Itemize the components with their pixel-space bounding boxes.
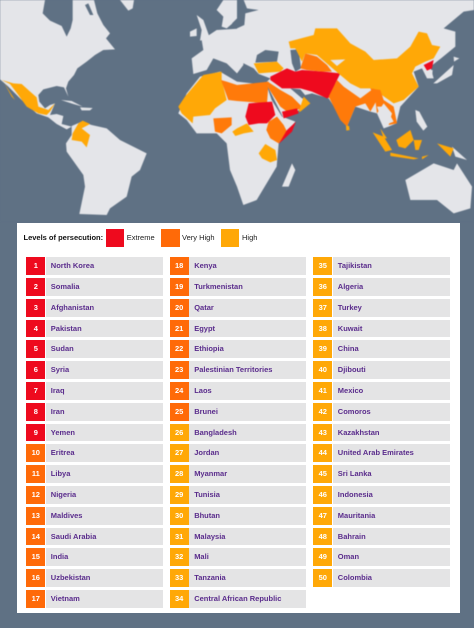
row 43: Kazakhstan xyxy=(338,428,379,437)
country: Central African Republic xyxy=(232,123,254,136)
row 1: 1 xyxy=(34,261,38,270)
row 18: 18 xyxy=(175,261,183,270)
row 13: 13 xyxy=(32,511,40,520)
row 21: Egypt xyxy=(194,324,215,333)
row 8: Iran xyxy=(51,407,65,416)
row 36: Algeria xyxy=(338,282,363,291)
row 42: 42 xyxy=(319,407,327,416)
row 6: Syria xyxy=(51,365,69,374)
row 18: Kenya xyxy=(194,261,217,270)
row 15 xyxy=(26,548,163,566)
country: Yemen xyxy=(282,108,299,118)
water: Black Sea xyxy=(255,50,279,63)
row 41: Mexico xyxy=(338,386,363,395)
row 48 xyxy=(313,528,450,545)
row 16 xyxy=(26,569,163,587)
row 45: Sri Lanka xyxy=(338,469,372,478)
row 29 xyxy=(170,486,306,504)
row 40: Djibouti xyxy=(338,365,366,374)
row 37 xyxy=(313,299,450,317)
row 9: Yemen xyxy=(51,428,75,437)
row 24 xyxy=(170,382,306,400)
row 34 xyxy=(170,590,306,608)
legend label: Extreme: Extreme xyxy=(127,233,155,242)
row 11 xyxy=(26,465,163,483)
row 5: Sudan xyxy=(51,344,74,353)
column: ranks 35 to 50 xyxy=(313,257,450,587)
country: Oman xyxy=(299,97,310,112)
row 28: 28 xyxy=(175,469,183,478)
row 27: 27 xyxy=(175,448,183,457)
row 3: Afghanistan xyxy=(51,303,94,312)
row 42 xyxy=(313,403,450,421)
row 26: Bangladesh xyxy=(194,428,237,437)
column: ranks 18 to 34 xyxy=(170,257,306,608)
row 32: 32 xyxy=(175,552,183,561)
row 30: 30 xyxy=(175,511,183,520)
row 50 xyxy=(313,569,450,587)
row 45: 45 xyxy=(319,469,327,478)
world map xyxy=(0,0,474,216)
land: Philippines xyxy=(415,110,427,131)
row 9 xyxy=(26,424,163,441)
countries: Ethiopia, Eritrea and Djibouti xyxy=(266,117,287,143)
row 6: 6 xyxy=(34,365,38,374)
row 12: 12 xyxy=(32,490,40,499)
row 19: Turkmenistan xyxy=(194,282,243,291)
row 28 xyxy=(170,465,306,483)
land: North America xyxy=(0,0,115,129)
row 47: Mauritania xyxy=(338,511,375,520)
row 49: Oman xyxy=(338,552,359,561)
row 10: Eritrea xyxy=(51,448,75,457)
row 49: 49 xyxy=(319,552,327,561)
row 28: Myanmar xyxy=(194,469,227,478)
row 15: 15 xyxy=(32,552,40,561)
row 39: China xyxy=(338,344,359,353)
row 38: Kuwait xyxy=(338,324,362,333)
row 7: Iraq xyxy=(51,386,65,395)
row 31 xyxy=(170,528,306,545)
row 31: Malaysia xyxy=(194,532,225,541)
row 15: India xyxy=(51,552,68,561)
row 33 xyxy=(170,569,306,587)
row 47: 47 xyxy=(319,511,327,520)
land: Caribbean islands xyxy=(61,100,93,110)
row 12 xyxy=(26,486,163,504)
countries: Syria, Iraq, Iran, Afghanistan and Pakistan xyxy=(270,68,340,98)
legend label: Very High: Very High xyxy=(182,233,215,242)
water: Caspian Sea xyxy=(290,49,301,72)
row 36 xyxy=(313,278,450,296)
row 46 xyxy=(313,486,450,504)
row 23 xyxy=(170,361,306,379)
row 9: 9 xyxy=(34,428,38,437)
row 35 xyxy=(313,257,450,275)
country: Colombia xyxy=(72,121,90,147)
legend label: High: High xyxy=(242,233,257,242)
row 23: Palestinian Territories xyxy=(194,365,272,374)
country: Nepal xyxy=(347,87,359,93)
row 47 xyxy=(313,507,450,525)
row 5: 5 xyxy=(34,344,38,353)
row 17 xyxy=(26,590,163,608)
row 13 xyxy=(26,507,163,525)
row 42: Comoros xyxy=(338,407,371,416)
country: Saudi Arabia xyxy=(268,82,304,112)
legend title: Levels of persecution: xyxy=(24,233,103,242)
row 43: 43 xyxy=(319,428,327,437)
row 25 xyxy=(170,403,306,421)
row 40 xyxy=(313,361,450,379)
land: Madagascar xyxy=(282,163,295,187)
country: South Korea xyxy=(427,70,433,77)
row 43 xyxy=(313,424,450,441)
country: North Korea xyxy=(424,60,434,71)
country: Sri Lanka xyxy=(346,125,350,131)
countries: Myanmar, Laos and Vietnam xyxy=(370,88,397,125)
row 44 xyxy=(313,444,450,462)
row 21 xyxy=(170,320,306,337)
row 4: Pakistan xyxy=(51,324,82,333)
row 50: 50 xyxy=(319,573,327,582)
land: Greenland xyxy=(120,0,134,11)
panel: ranking list xyxy=(17,223,460,613)
row 22: Ethiopia xyxy=(194,344,224,353)
row 44: 44 xyxy=(319,448,327,457)
row 10: 10 xyxy=(32,448,40,457)
row 26 xyxy=(170,424,306,441)
row 37: 37 xyxy=(319,303,327,312)
land: Japan xyxy=(433,57,459,83)
land: Africa xyxy=(178,72,295,205)
country: India xyxy=(329,80,377,127)
row 49 xyxy=(313,548,450,566)
country: Kyrgyzstan xyxy=(330,59,345,66)
row 14: 14 xyxy=(32,532,40,541)
countries: Libya and Egypt xyxy=(221,80,269,103)
row 44: United Arab Emirates xyxy=(338,448,414,457)
row 32 xyxy=(170,548,306,566)
row 1 xyxy=(26,257,163,275)
row 17: Vietnam xyxy=(51,594,80,603)
countries: Turkmenistan and Uzbekistan xyxy=(300,53,332,72)
row 41: 41 xyxy=(319,386,327,395)
row 19 xyxy=(170,278,306,296)
row 2 xyxy=(26,278,163,296)
row 4 xyxy=(26,320,163,337)
row 27 xyxy=(170,444,306,462)
land: South America xyxy=(66,122,147,215)
row 40: 40 xyxy=(319,365,327,374)
row 30: Bhutan xyxy=(194,511,220,520)
row 3 xyxy=(26,299,163,317)
row 38 xyxy=(313,320,450,337)
row 20: Qatar xyxy=(194,303,214,312)
country: Sudan xyxy=(245,102,275,125)
row 11: 11 xyxy=(32,469,40,478)
country: Nigeria xyxy=(213,117,232,133)
row 11: Libya xyxy=(51,469,70,478)
row 35: Tajikistan xyxy=(338,261,372,270)
row 48: 48 xyxy=(319,532,327,541)
row 21: 21 xyxy=(175,324,183,333)
row 35: 35 xyxy=(319,261,327,270)
water: Arctic channels of Canada xyxy=(85,3,93,15)
row 10 xyxy=(26,444,163,462)
land: Eurasia xyxy=(237,0,474,128)
legend: levels of persecution xyxy=(24,229,257,247)
row 6 xyxy=(26,361,163,379)
row 19: 19 xyxy=(175,282,183,291)
legend swatch: Extreme xyxy=(106,229,124,247)
row 50: Colombia xyxy=(338,573,372,582)
row 33: Tanzania xyxy=(194,573,226,582)
row 32: Mali xyxy=(194,552,209,561)
legend swatch: Very High xyxy=(161,229,180,247)
row 48: Bahrain xyxy=(338,532,366,541)
row 29: Tunisia xyxy=(194,490,220,499)
row 7: 7 xyxy=(34,386,38,395)
land: Britain and Ireland xyxy=(190,15,210,41)
row 18 xyxy=(170,257,306,275)
countries: Malaysia and Indonesia xyxy=(373,128,454,159)
row 12: Nigeria xyxy=(51,490,76,499)
row 3: 3 xyxy=(34,303,38,312)
row 2: 2 xyxy=(34,282,38,291)
country: Thailand xyxy=(377,107,394,125)
row 39 xyxy=(313,340,450,358)
row 26: 26 xyxy=(175,428,183,437)
countries: Kenya and Tanzania xyxy=(259,144,277,162)
row 24: Laos xyxy=(194,386,212,395)
country: Turkey xyxy=(254,62,284,73)
row 34: Central African Republic xyxy=(194,594,281,603)
row 7 xyxy=(26,382,163,400)
row 34: 34 xyxy=(175,594,183,603)
row 24: 24 xyxy=(175,386,183,395)
row 31: 31 xyxy=(175,532,183,541)
row 25: 25 xyxy=(175,407,183,416)
row 13: Maldives xyxy=(51,511,82,520)
row 33: 33 xyxy=(175,573,183,582)
row 38: 38 xyxy=(319,324,327,333)
land: Europe xyxy=(192,28,243,74)
row 14: Saudi Arabia xyxy=(51,532,96,541)
row 22: 22 xyxy=(175,344,183,353)
row 16: Uzbekistan xyxy=(51,573,90,582)
row 8 xyxy=(26,403,163,421)
country: Somalia xyxy=(279,122,296,144)
row 46: Indonesia xyxy=(338,490,373,499)
row 14 xyxy=(26,528,163,545)
row 25: Brunei xyxy=(194,407,218,416)
countries: Algeria, Mauritania and Mali xyxy=(178,72,227,123)
land: Scandinavia xyxy=(217,0,238,28)
row 8: 8 xyxy=(34,407,38,416)
row 23: 23 xyxy=(175,365,183,374)
water: Persian Gulf xyxy=(290,88,309,99)
row 17: 17 xyxy=(32,594,40,603)
legend swatch: High xyxy=(221,229,239,247)
row 41 xyxy=(313,382,450,400)
row 1: North Korea xyxy=(51,261,94,270)
land: Papua New Guinea xyxy=(452,147,467,160)
row 36: 36 xyxy=(319,282,327,291)
row 20: 20 xyxy=(175,303,183,312)
row 20 xyxy=(170,299,306,317)
row 45 xyxy=(313,465,450,483)
countries: Kazakhstan and China xyxy=(289,28,440,103)
row 22 xyxy=(170,340,306,358)
row 2: Somalia xyxy=(51,282,80,291)
row 16: 16 xyxy=(32,573,40,582)
column: ranks 1 to 17 xyxy=(26,257,163,608)
row 46: 46 xyxy=(319,490,327,499)
row 29: 29 xyxy=(175,490,183,499)
country: Mexico xyxy=(2,80,55,115)
row 37: Turkey xyxy=(338,303,362,312)
row 5 xyxy=(26,340,163,358)
land: Australia xyxy=(405,163,472,213)
water: Baltic Sea xyxy=(232,0,259,28)
row 30 xyxy=(170,507,306,525)
row 4: 4 xyxy=(34,324,38,333)
row 27: Jordan xyxy=(194,448,219,457)
row 39: 39 xyxy=(319,344,327,353)
